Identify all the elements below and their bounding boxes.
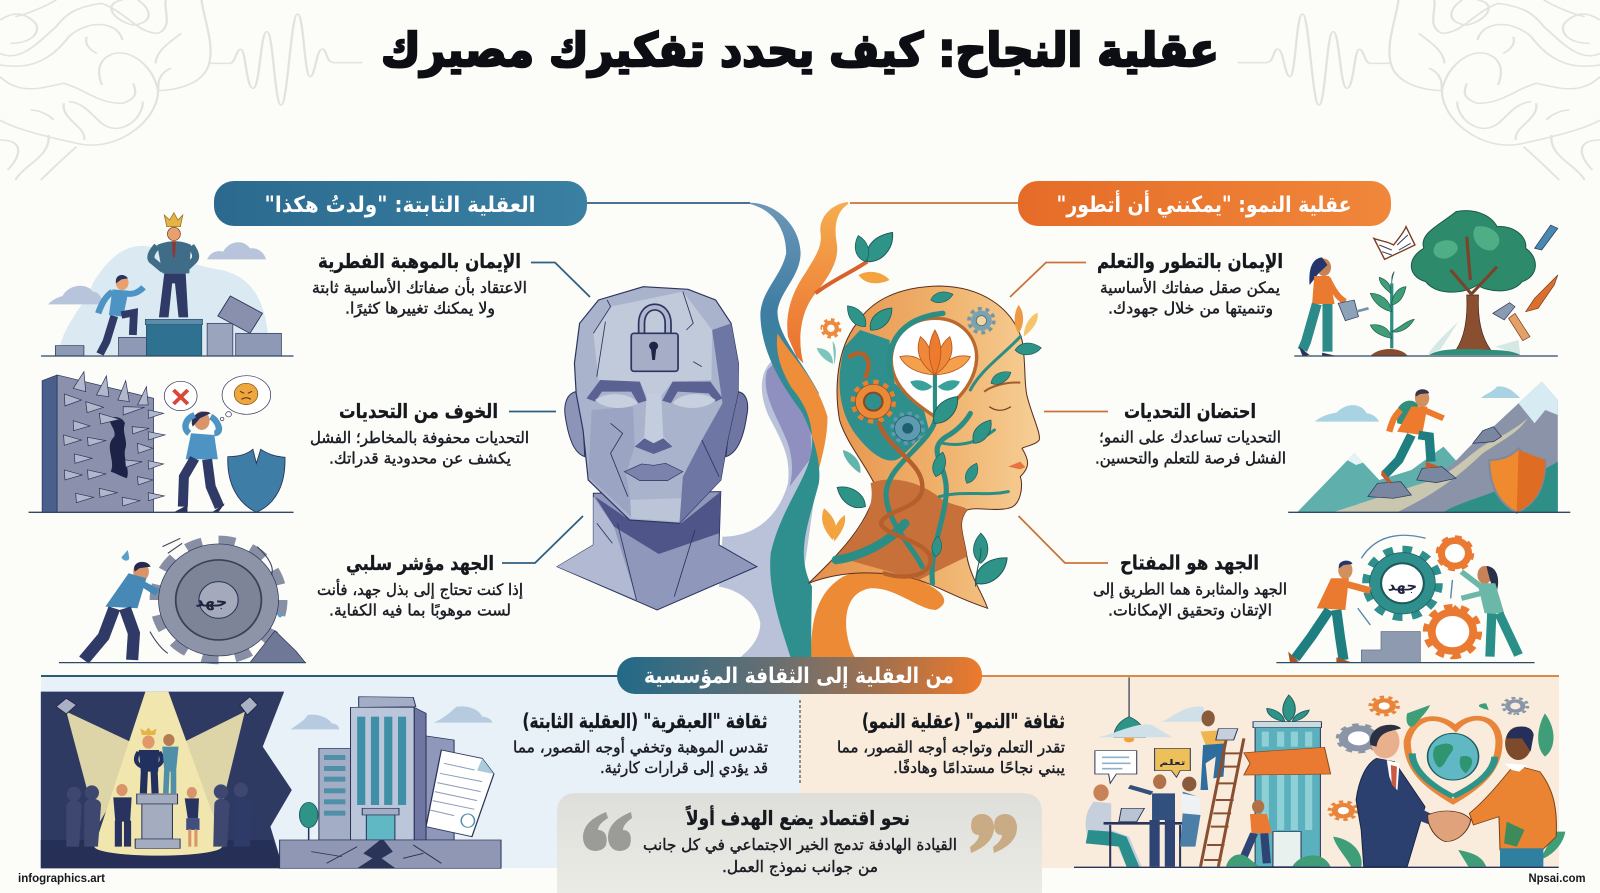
scene: people turning gears	[1288, 535, 1519, 663]
text block: embrace challenges: التحديات تساعدك على النمو؛	[1099, 428, 1281, 446]
quote body: القيادة الهادفة تدمج الخير الاجتماعي في كل جانب	[643, 836, 957, 855]
branch with leaves above growth head	[815, 227, 900, 293]
icon: orange gear in head	[853, 382, 893, 421]
decorative brain line art: top left	[0, 0, 362, 180]
ground line	[29, 510, 294, 514]
text block: innate talent: الاعتقاد بأن صفاتك الأساسية ثابتة	[312, 277, 527, 297]
section divider line	[41, 675, 1559, 677]
scene: people turning gears: جهد	[1388, 579, 1417, 594]
orange banner	[1244, 747, 1331, 775]
icon: padlock on forehead	[631, 307, 678, 371]
icon: closing quotation marks	[970, 814, 1017, 853]
pedestal	[135, 794, 180, 848]
ground line	[1074, 865, 1559, 869]
text block: embrace challenges	[1095, 399, 1286, 468]
stone head: left closed eye	[595, 394, 638, 408]
text block: embrace challenges: الفشل فرصة للتعلم والتحسين.	[1095, 450, 1286, 468]
text block: belief in growth: الإيمان بالتطور والتعلم	[1097, 249, 1283, 273]
stone head: right closed eye	[673, 394, 716, 408]
growth culture building	[1253, 695, 1321, 867]
text block: growth culture: يبني نجاحًا مستدامًا وهادفًا.	[893, 759, 1065, 778]
ground line	[41, 354, 294, 358]
scene: man pushing gear	[84, 538, 305, 663]
spotlight beams	[66, 692, 245, 856]
stone head: left ear	[565, 392, 585, 457]
clouds	[291, 706, 492, 729]
stone head: nose	[635, 393, 673, 453]
text block: growth culture: تقدر التعلم وتواجه أوجه القصور، مما	[837, 736, 1065, 758]
text block: growth culture: ثقافة "النمو" (عقلية النمو)	[862, 709, 1065, 733]
text block: belief in growth	[1097, 249, 1283, 318]
people on floor	[113, 784, 199, 847]
illustration: genius culture stage and corporate building	[41, 692, 501, 868]
ribbon: orange mid band	[777, 333, 827, 483]
icon: torn document	[426, 750, 494, 837]
pill heading: fixed mindset	[214, 181, 587, 226]
growth head: eyebrow and eye	[984, 383, 1020, 410]
text block: effort is key	[1093, 550, 1287, 620]
stone head: skull and face	[574, 287, 738, 523]
growth head: teal ring accent	[890, 313, 943, 377]
scene: planting and tree	[1299, 211, 1558, 356]
ground line	[1294, 354, 1558, 358]
seated team	[1086, 774, 1201, 867]
stone head: cheek	[588, 407, 635, 518]
stone head: right brow	[662, 382, 722, 403]
text block: genius culture: ثقافة "العبقرية" (العقلية الثابتة)	[522, 709, 768, 733]
icon: tree	[299, 802, 318, 840]
growth head: vine cluster top	[930, 290, 954, 304]
connector lines: growth mindset	[850, 203, 1108, 563]
stone head: neck light facet	[557, 497, 636, 600]
text block: effort negative: لست موهوبًا بما فيه الكفاية.	[329, 602, 511, 620]
ground line	[1288, 510, 1570, 514]
growth head: flower stem leaves	[910, 380, 960, 391]
cracked ground	[280, 840, 501, 868]
footer credit left: infographics.art	[18, 871, 105, 885]
outer leaves around growth head	[822, 305, 1038, 589]
bottom panel backgrounds	[41, 677, 1559, 868]
ribbon: lavender highlight	[766, 357, 812, 487]
pill heading: growth mindset: عقلية النمو: "يمكنني أن أتطور"	[1056, 189, 1352, 218]
ground line	[1276, 661, 1535, 665]
spotlights	[56, 697, 258, 715]
clouds	[1098, 707, 1208, 737]
ribbon: teal stream	[770, 377, 819, 660]
icon: opening quotation marks	[583, 812, 632, 851]
people on pedestal	[136, 727, 179, 793]
growth head: flower stem	[929, 373, 941, 417]
silhouettes	[66, 783, 251, 847]
stone head: nostril shadow	[635, 438, 673, 454]
dashed separator	[799, 700, 801, 785]
text block: innate talent: ولا يمكنك تغييرها كثيرًا.	[345, 300, 495, 318]
growth head: vines brown	[850, 353, 931, 577]
text block: effort negative: إذا كنت تحتاج إلى بذل جهد، فأنت	[317, 579, 523, 600]
handshake	[1428, 811, 1471, 842]
decorative brain line art: top right	[1238, 0, 1600, 180]
small teal sprig beside head	[817, 342, 836, 363]
pill heading: culture section: من العقلية إلى الثقافة المؤسسية	[644, 664, 954, 689]
text block: fear of challenges: يكشف عن محدودية قدراتك.	[329, 450, 511, 468]
scene: climber on mountain with shield	[1297, 382, 1558, 513]
icon: grey gear in head	[969, 309, 994, 333]
central ribbons and heads	[557, 202, 1041, 660]
text block: effort negative: الجهد مؤشر سلبي	[346, 551, 494, 576]
growth head: lips	[1008, 462, 1025, 469]
gears behind handshake	[1330, 697, 1528, 820]
growth head: teal back of head	[840, 330, 929, 461]
growth head: inner leaves	[927, 343, 1041, 557]
text block: fear of challenges: الخوف من التحديات	[339, 399, 498, 423]
building: side tower	[319, 748, 352, 840]
small orange gear beside head	[822, 320, 840, 337]
illustration: growth culture workplace and handshake	[1074, 677, 1565, 867]
stone head: light forehead	[593, 292, 712, 397]
man in orange sweater	[1469, 727, 1556, 867]
ribbon: lavender stone stream	[719, 357, 815, 660]
title: عقلية النجاح: كيف يحدد تفكيرك مصيرك	[381, 23, 1219, 77]
scene: spiked wall and worried person	[42, 372, 285, 512]
growth head: ring around flower	[891, 318, 977, 417]
scene: man pushing gear: جهد	[195, 592, 227, 610]
growth head: vines teal	[836, 337, 1020, 583]
ground line	[59, 661, 306, 665]
chat bubbles: تعلم	[1159, 758, 1186, 767]
ribbon: orange growth stream	[787, 202, 848, 363]
text block: genius culture	[513, 709, 768, 778]
ribbon: blue fixed stream	[750, 203, 819, 417]
stone head: mouth	[624, 463, 683, 481]
stone head: neck and shoulders	[557, 492, 757, 610]
quote heading: نحو اقتصاد يضع الهدف أولاً	[686, 804, 910, 830]
stone head: cracks	[593, 292, 719, 600]
icon: lotus flower	[900, 330, 970, 375]
floor	[41, 840, 283, 868]
text block: genius culture: تقدس الموهبة وتخفي أوجه القصور، مما	[513, 736, 768, 758]
footer credit right: Npsai.com	[1528, 871, 1586, 885]
building: right tower	[419, 735, 454, 840]
text block: growth culture	[837, 709, 1065, 778]
text block: fear of challenges	[310, 399, 529, 468]
text block: fear of challenges: التحديات محفوفة بالمخاطر؛ الفشل	[310, 429, 529, 447]
text block: effort is key: الجهد هو المفتاح	[1120, 550, 1259, 574]
chat bubbles	[1095, 748, 1190, 783]
connector lines: fixed mindset	[502, 203, 750, 563]
building: main tower	[351, 697, 426, 840]
quote body: من جوانب نموذج العمل.	[722, 858, 878, 877]
text block: belief in growth: يمكن صقل صفاتك الأساسية	[1100, 278, 1280, 297]
scene: crowned man on pedestal	[48, 213, 281, 356]
text block: effort is key: الإتقان وتحقيق الإمكانات.	[1108, 602, 1272, 620]
pill heading: culture section	[617, 657, 982, 694]
quote panel	[557, 793, 1042, 893]
pill heading: fixed mindset: العقلية الثابتة: "ولدتُ هكذا"	[264, 193, 536, 218]
growth head: top leaves	[865, 304, 898, 334]
icon: blue gear in head	[893, 414, 923, 443]
stone head: dark right side	[679, 323, 738, 523]
plants	[1226, 832, 1565, 867]
stone head: left brow	[586, 380, 647, 403]
ribbon: orange lower trunk	[811, 570, 944, 660]
stage backdrop	[41, 692, 292, 868]
text block: effort negative	[317, 551, 523, 620]
text block: embrace challenges: احتضان التحديات	[1124, 399, 1256, 423]
stone head: chin facet	[630, 498, 681, 522]
heart and globe	[1406, 703, 1554, 802]
text block: innate talent: الإيمان بالموهبة الفطرية	[318, 249, 521, 273]
pill heading: growth mindset	[1018, 181, 1391, 226]
businessman in suit	[1356, 725, 1433, 867]
illustrations: growth mindset	[1276, 211, 1570, 663]
illustrations: fixed mindset	[29, 213, 306, 663]
person on ladder	[1201, 710, 1238, 790]
hanging lamp	[1114, 677, 1145, 742]
text block: innate talent	[312, 249, 527, 318]
quote body	[643, 836, 957, 877]
text block: belief in growth: وتنميتها من خلال جهودك.	[1108, 300, 1273, 318]
stone head: jaw shadow	[595, 492, 721, 554]
growth head: left top leaf	[843, 302, 870, 331]
text block: genius culture: قد يؤدي إلى قرارات كارثية.	[600, 759, 768, 778]
stone head: right ear	[726, 392, 748, 457]
text block: effort is key: الجهد والمثابرة هما الطريق إلى	[1093, 580, 1287, 600]
ladder	[1201, 738, 1244, 867]
growth head: silhouette	[809, 286, 1039, 608]
growth head: dark neck tone	[836, 479, 967, 580]
woman walking	[1236, 800, 1272, 863]
